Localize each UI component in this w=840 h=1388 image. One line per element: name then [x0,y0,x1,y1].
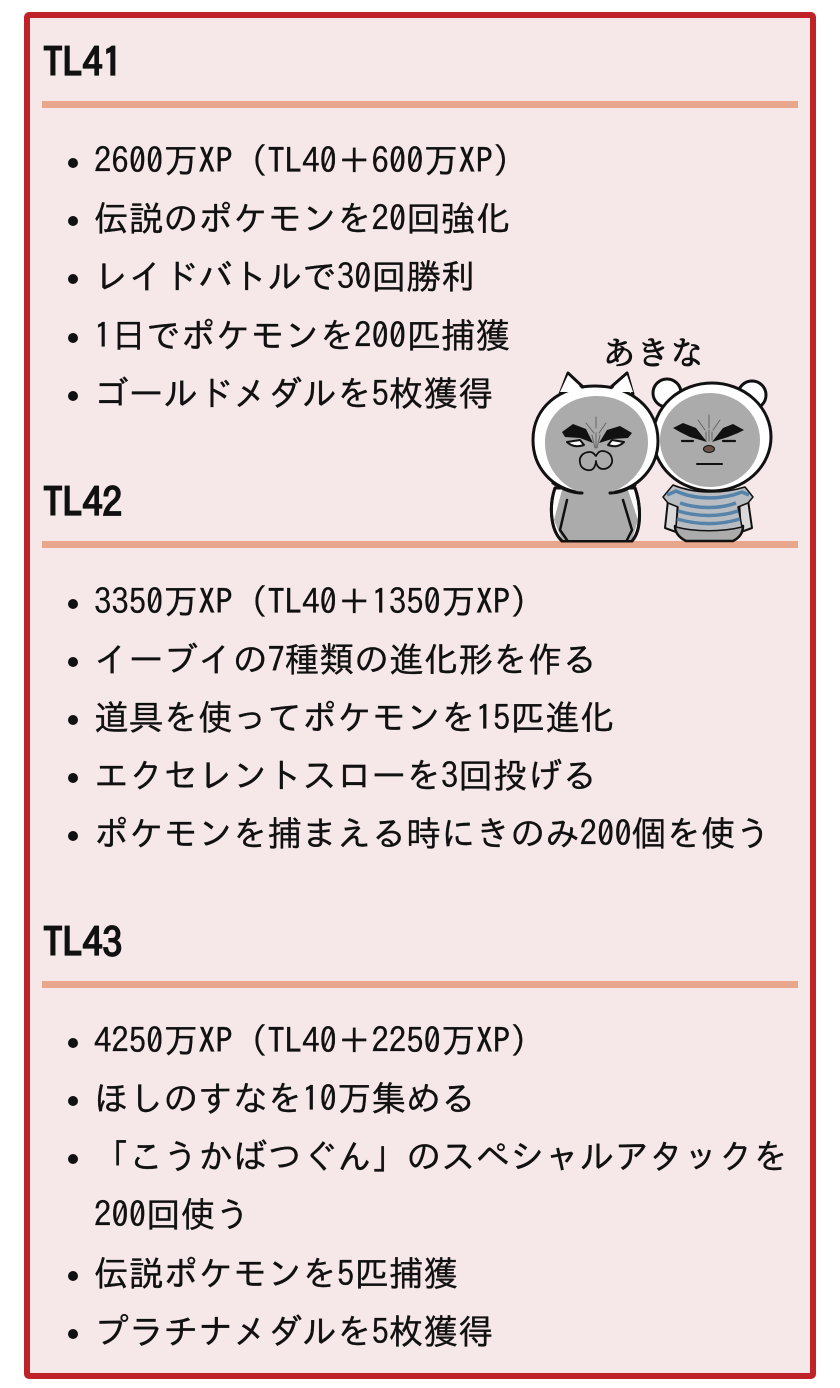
list item: excellent throws: エクセレントスローを3回投げる [94,758,597,793]
list item: catch in a day: 1日でポケモンを200匹捕獲 [94,318,510,353]
bullet [68,391,78,401]
list item: TL41 XP: 2600万XP（TL40＋600万XP） [94,143,528,178]
bullet [68,1154,78,1164]
list item: stardust: ほしのすなを10万集める [94,1081,476,1116]
list item: berries: ポケモンを捕まえる時にきのみ200個を使う [94,816,770,851]
list item: TL43 XP: 4250万XP（TL40＋2250万XP） [94,1023,545,1058]
character: cat [533,373,658,541]
list item: platinum medals: プラチナメダルを5枚獲得 [94,1314,493,1349]
bullet [68,657,78,667]
cat face [545,396,648,500]
bullet [68,773,78,783]
heading: TL42: TL42 [43,482,122,522]
bullet [68,333,78,343]
cat muzzle [580,451,612,470]
bullet [68,599,78,609]
list item: TL42 XP: 3350万XP（TL40＋1350万XP） [94,584,545,619]
heading: TL41: TL41 [43,42,122,82]
bullet [68,1271,78,1281]
belly [675,526,743,541]
list item: legendary catches: 伝説ポケモンを5匹捕獲 [94,1256,458,1291]
heading: TL43: TL43 [43,922,122,962]
cat head [533,386,658,493]
list item: raid wins: レイドバトルで30回勝利 [94,259,476,294]
bullet [68,1329,78,1339]
bullet [68,831,78,841]
caption: あきな: あきな [603,328,705,374]
shirt [663,485,753,531]
bear eyebrows [673,423,744,442]
character: bear [653,379,771,541]
bullet [68,274,78,284]
list item: special attack line 1: 「こうかばつぐん」のスペシャルアタックを [94,1139,788,1174]
cat ears [560,373,633,394]
cat eyes [567,440,624,446]
bear nose [704,446,714,452]
bear mouth [697,463,722,465]
cat body [551,488,640,541]
list item: gold medals: ゴールドメダルを5枚獲得 [94,376,493,411]
bullet [68,216,78,226]
bullet [68,1096,78,1106]
cat eyebrows [562,424,632,443]
list item: legendary power up: 伝説のポケモンを20回強化 [94,201,510,236]
bullet [68,1038,78,1048]
list item: special attack line 2: 200回使う [94,1197,250,1232]
arms [665,500,752,532]
bullet [68,158,78,168]
bullet [68,715,78,725]
list item: item evolutions: 道具を使ってポケモンを15匹進化 [94,700,614,735]
list item: eevee evolutions: イーブイの7種類の進化形を作る [94,642,597,677]
